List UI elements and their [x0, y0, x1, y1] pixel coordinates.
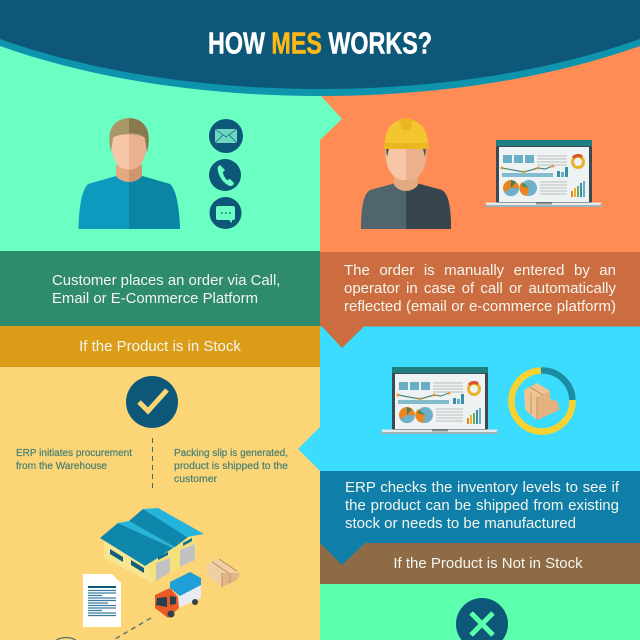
icon: phone [209, 159, 241, 191]
icon: dashboard laptop [485, 140, 602, 207]
dashed route [115, 618, 151, 639]
text: ERP checks inventory [345, 479, 620, 532]
text: packing slip: customer [174, 474, 218, 485]
text: packing slip: Packing slip is generated, [174, 448, 288, 459]
text: ERP checks inventory: the product can be shipped from existing [345, 497, 619, 514]
text: operator entry: The order is manually entered by an [344, 262, 616, 279]
icon: check circle [126, 376, 178, 428]
header curve [0, 0, 640, 96]
dashed divider [152, 438, 154, 492]
icon: cross circle [456, 598, 508, 640]
icon: customer oval [50, 638, 82, 640]
band: customer order [0, 251, 320, 326]
text: ERP checks inventory: stock or needs to be manufactured [345, 515, 576, 532]
text: customer places order [52, 273, 280, 307]
text: operator entry: operator in case of call or automatically [344, 280, 616, 297]
icon: chat [210, 197, 242, 229]
icon: warehouse [100, 508, 204, 583]
title: HOW MES WORKS? [208, 26, 432, 60]
text: ERP procurement [16, 448, 132, 472]
text: ERP procurement: ERP initiates procurement [16, 448, 132, 459]
text: customer places order: Customer places an order via Call, [52, 273, 280, 289]
text: operator entry: reflected (email or e-commerce platform) [344, 298, 616, 315]
text: if not in stock: If the Product is Not in Stock [393, 555, 583, 572]
text: packing slip [174, 448, 288, 485]
band: ERP check [320, 471, 640, 565]
band: operator entry [320, 252, 640, 348]
band: not in stock [320, 543, 640, 584]
icon: stacked boxes [207, 558, 240, 587]
text: ERP procurement: from the Warehouse [16, 461, 107, 472]
icon: operator with helmet [361, 118, 451, 229]
text: ERP checks inventory: ERP checks the inventory levels to see if [345, 479, 619, 496]
icon: inventory ring [512, 369, 572, 432]
icon: customer [78, 118, 180, 229]
icon: dashboard laptop ERP [381, 367, 498, 434]
icon: packing slip document [83, 574, 121, 627]
cyan arrow into yellow panel [298, 427, 320, 471]
band: in stock [0, 326, 320, 367]
text: customer places order: Email or E-Commerce Platform [52, 291, 258, 307]
mint arrow into orange [318, 90, 342, 140]
text: if in stock: If the Product is in Stock [79, 338, 241, 355]
icon: email [209, 119, 243, 153]
text: operator entry [344, 262, 616, 315]
text: packing slip: product is shipped to the [174, 461, 288, 472]
icon: truck [155, 572, 201, 618]
